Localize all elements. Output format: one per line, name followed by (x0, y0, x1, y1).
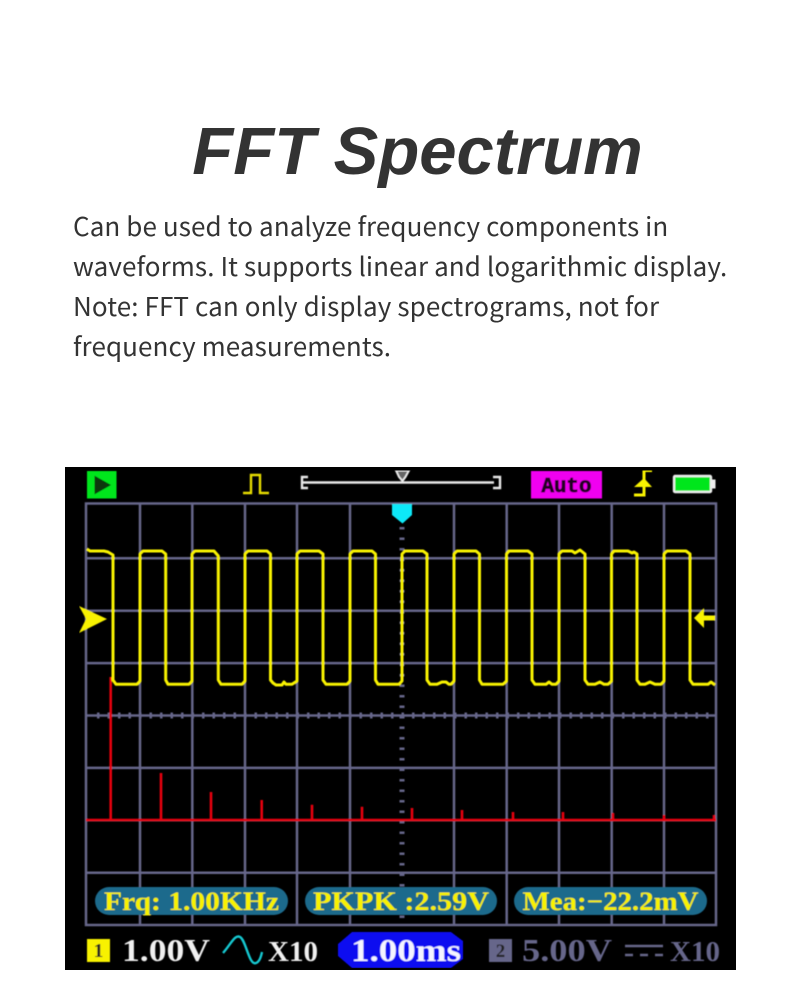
memory position bar (302, 470, 500, 488)
description text (73, 207, 727, 364)
battery icon (674, 476, 716, 492)
auto mode badge: Auto (542, 476, 592, 499)
trigger edge icon (634, 470, 652, 495)
description text: Can be used to analyze frequency components in (73, 207, 668, 244)
channel 1 scale: 1.00V (122, 932, 210, 968)
channel 2 badge: 2 (496, 941, 505, 962)
trigger level arrow (694, 608, 715, 628)
mean readout: Mea:−22.2mV (522, 887, 699, 916)
description text: waveforms. It supports linear and logarithmic display. (73, 247, 727, 284)
channel 2 probe: X10 (670, 937, 720, 968)
time cursor marker (392, 504, 412, 524)
run status icon (87, 471, 116, 498)
timebase badge: 1.00ms (351, 932, 461, 968)
channel 1 probe: X10 (268, 937, 318, 968)
channel 2 badge (489, 939, 512, 962)
channel 2 scale: 5.00V (522, 932, 612, 968)
auto mode badge (531, 471, 602, 499)
AC coupling icon (223, 936, 262, 963)
channel 1 badge: 1 (94, 940, 104, 962)
frequency readout: Frq: 1.00KHz (104, 887, 279, 916)
waveform trace (87, 549, 715, 685)
DC coupling icon (625, 946, 663, 955)
title: FFT Spectrum (192, 114, 643, 189)
peak to peak readout: PKPK :2.59V (313, 887, 489, 916)
description text: Note: FFT can only display spectrograms, not for (73, 287, 659, 324)
description text: frequency measurements. (73, 327, 391, 364)
spectrum trace (86, 677, 716, 820)
pulse icon (243, 475, 269, 493)
channel level marker (79, 606, 107, 633)
channel 1 badge (87, 939, 110, 962)
